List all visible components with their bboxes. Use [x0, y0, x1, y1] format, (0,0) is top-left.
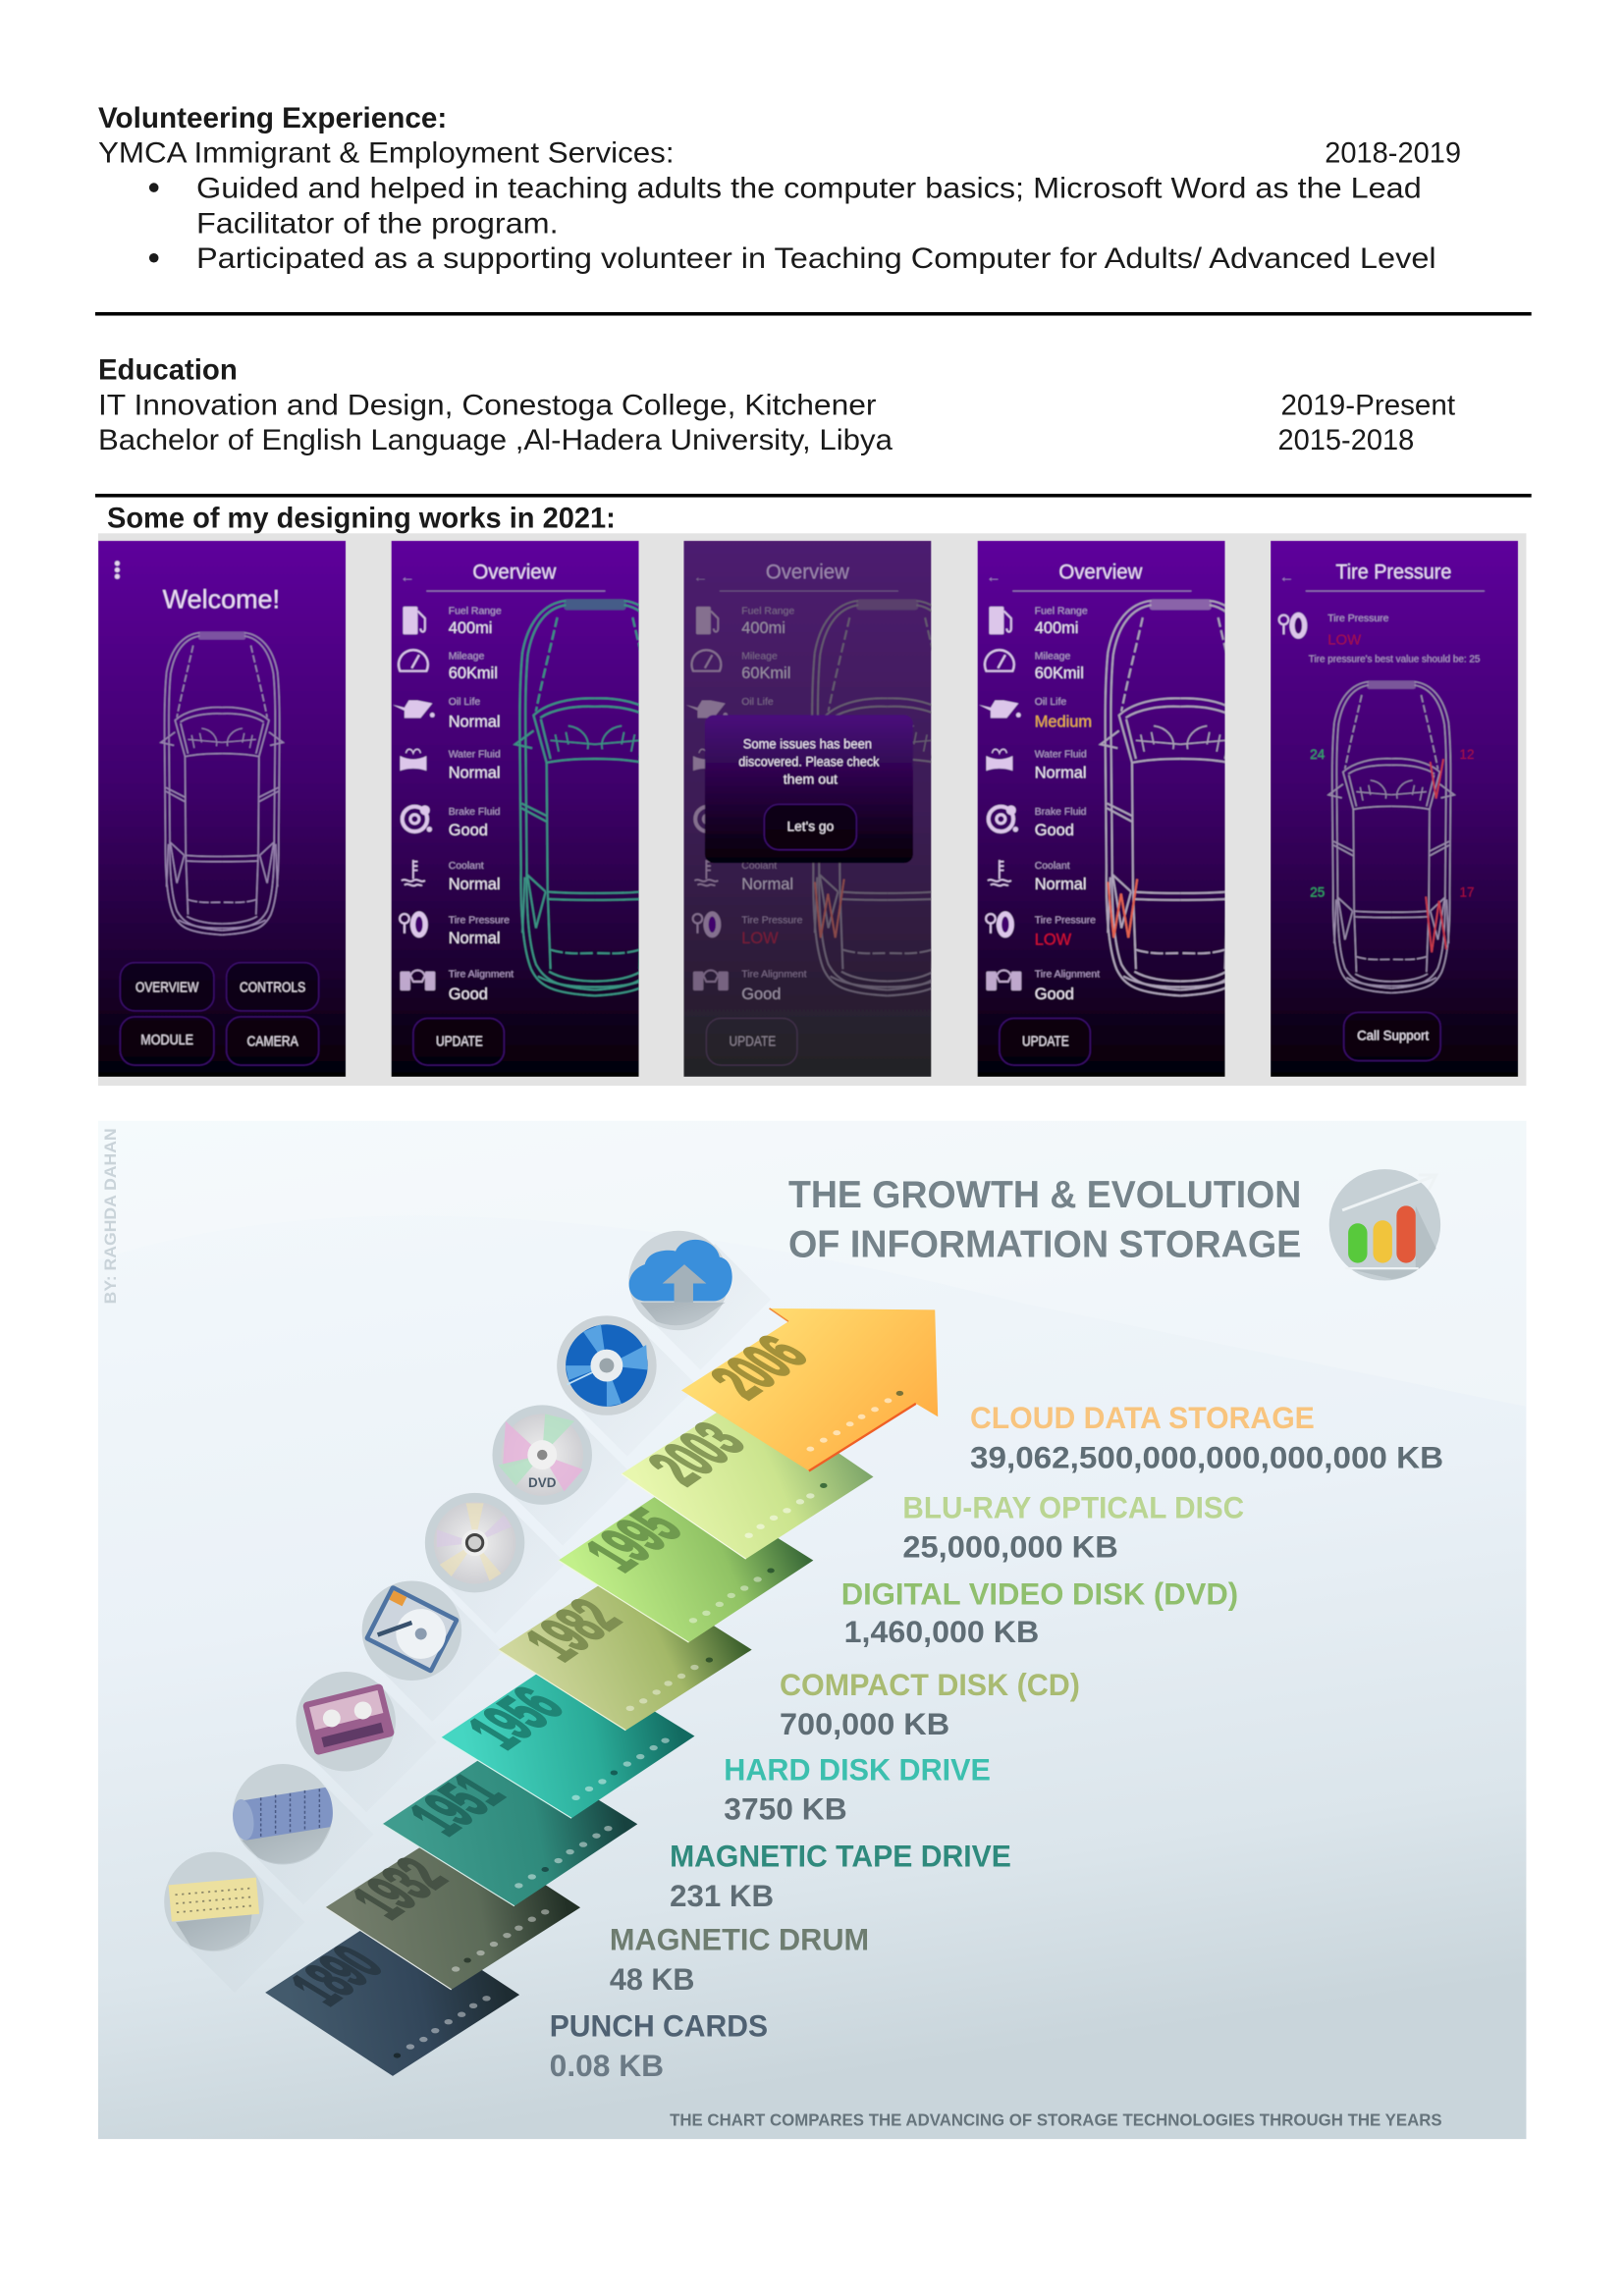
dim status labels: Tire Pressure — [741, 915, 803, 926]
plate: 1982: 1982 — [510, 1589, 635, 1671]
status labels: Fuel Range — [1035, 606, 1088, 616]
status labels: Brake Fluid — [1035, 807, 1087, 818]
car outline — [161, 631, 283, 934]
back arrow: ← — [986, 569, 1001, 586]
title rule — [1012, 591, 1191, 592]
status values: Normal — [449, 876, 501, 893]
status values: Normal — [1035, 765, 1087, 782]
title: Tire Pressure — [1335, 561, 1451, 584]
button labels — [135, 979, 305, 1050]
alert message: discovered. Please check — [738, 755, 880, 770]
icon: compact disc — [425, 1493, 566, 1633]
title rule — [720, 591, 898, 592]
value: blu-ray: 25,000,000 KB — [902, 1530, 1118, 1565]
icon: dvd disc: DVD — [528, 1475, 557, 1490]
back arrow: ← — [1279, 569, 1294, 586]
plate: 1995 — [559, 1478, 813, 1642]
button labels: OVERVIEW — [135, 979, 199, 995]
label: cloud data storage: CLOUD DATA STORAGE — [970, 1401, 1315, 1435]
icon: magnetic drum — [231, 1764, 374, 1904]
status labels: Fuel Range — [449, 606, 502, 616]
plate: 2003 — [622, 1392, 874, 1559]
plate: 1951 — [383, 1742, 637, 1906]
dim red wheel lines — [815, 880, 844, 937]
status labels: Water Fluid — [449, 750, 501, 761]
label: punch cards: PUNCH CARDS — [550, 2009, 768, 2044]
status labels: Brake Fluid — [449, 807, 501, 818]
title: THE GROWTH & EVOLUTION — [788, 1174, 1301, 1216]
label: cd: COMPACT DISK (CD) — [780, 1668, 1080, 1702]
value: cloud: 39,062,500,000,000,000,000 KB — [970, 1441, 1443, 1475]
status values: Good — [1035, 986, 1074, 1003]
update button — [413, 1018, 504, 1065]
update button — [1000, 1018, 1090, 1065]
icon: blu-ray disc — [557, 1315, 697, 1457]
university dates: 2015-2018 — [1277, 424, 1414, 456]
plate: 2003: 2003 — [633, 1413, 760, 1495]
low value: LOW — [1035, 932, 1072, 949]
back arrow: ← — [693, 569, 708, 586]
credit: BY: RAGHDA DAHAN — [102, 1128, 120, 1304]
value: cd: 700,000 KB — [780, 1707, 949, 1741]
storage labels — [550, 1401, 1443, 2083]
value: dvd: 1,460,000 KB — [844, 1615, 1039, 1649]
red wheel lines — [1108, 880, 1137, 937]
heading: designing works: Some of my designing works in 2021: — [107, 502, 616, 534]
status labels: Oil Life — [449, 697, 480, 708]
dim status labels: Tire Alignment — [741, 970, 807, 981]
status values: Normal — [449, 713, 501, 730]
status values: Good — [449, 822, 488, 839]
text block: education — [98, 354, 1456, 456]
status values: 60Kmil — [449, 665, 498, 682]
status labels: Tire Alignment — [1035, 970, 1100, 981]
status labels: Coolant — [1035, 861, 1070, 872]
dim status values — [741, 619, 793, 1003]
title: Overview — [1058, 561, 1143, 584]
status values: Normal — [449, 930, 501, 947]
tire values: 25 — [1310, 884, 1325, 899]
button labels: CAMERA — [246, 1034, 298, 1050]
dim low value: LOW — [741, 930, 779, 947]
status values: 60Kmil — [1035, 665, 1084, 682]
plate: 1956 — [441, 1656, 694, 1818]
tire label: Tire Pressure — [1327, 614, 1389, 624]
status labels — [449, 606, 514, 981]
red rear wheel lines — [1426, 896, 1446, 952]
alert dialog — [705, 715, 913, 863]
status values: Good — [1035, 822, 1074, 839]
buttons — [120, 963, 319, 1065]
dim status values: Good — [741, 986, 781, 1003]
value: hard disk: 3750 KB — [724, 1792, 847, 1827]
plate: 1932: 1932 — [337, 1847, 461, 1929]
icon: cloud upload — [628, 1231, 771, 1370]
welcome title: Welcome! — [163, 584, 280, 614]
value: punch cards: 0.08 KB — [550, 2049, 664, 2083]
university line: Bachelor of English Language ,Al-Hadera University, Libya — [98, 424, 893, 456]
plate: 1995: 1995 — [570, 1499, 697, 1581]
dim status labels: Fuel Range — [741, 606, 794, 616]
status labels: Tire Alignment — [449, 970, 514, 981]
dim car outline — [810, 599, 931, 997]
support button — [1344, 1012, 1440, 1061]
phone screen: overview with issues — [978, 540, 1225, 1077]
status values: 400mi — [449, 619, 492, 637]
status values — [1035, 619, 1087, 1003]
plate: 1951: 1951 — [395, 1764, 518, 1844]
advice line: Tire pressure's best value should be: 25 — [1309, 655, 1481, 666]
tire values: 24 — [1310, 747, 1326, 762]
bullet one text: Guided and helped in teaching adults the computer basics; Microsoft Word as the Lead — [196, 173, 1422, 205]
dim status labels: Coolant — [741, 861, 777, 872]
icon: rising bar chart — [1329, 1169, 1440, 1280]
phone screen: tire pressure — [1271, 541, 1518, 1077]
status labels: Tire Pressure — [449, 915, 510, 926]
phone screen: overview with alert — [683, 540, 931, 1077]
status values: 400mi — [1035, 619, 1078, 637]
car outline teal — [513, 599, 639, 997]
tire icon — [1279, 613, 1307, 639]
title: OF INFORMATION STORAGE — [788, 1224, 1301, 1266]
title: Overview — [766, 561, 850, 584]
tire values: 12 — [1460, 747, 1474, 762]
alert message — [738, 737, 880, 787]
status labels: Oil Life — [1035, 697, 1066, 708]
dim update label: UPDATE — [730, 1034, 776, 1050]
employer line: YMCA Immigrant & Employment Services: — [98, 137, 675, 170]
dim status icons — [685, 607, 729, 990]
status labels: Tire Pressure — [1035, 915, 1096, 926]
status values — [449, 619, 501, 1003]
update label: UPDATE — [436, 1034, 483, 1050]
status values: Normal — [1035, 876, 1087, 893]
phone screen: welcome — [98, 541, 346, 1077]
icon circles with long shadows — [164, 1231, 771, 1993]
college line: IT Innovation and Design, Conestoga College, Kitchener — [98, 389, 877, 421]
text block: volunteering experience — [98, 102, 1461, 275]
bullet one continuation: Facilitator of the program. — [196, 207, 559, 240]
label: blu-ray: BLU-RAY OPTICAL DISC — [902, 1490, 1244, 1524]
bullet two — [149, 253, 158, 263]
status labels: Water Fluid — [1035, 750, 1087, 761]
icon: hard disk — [362, 1580, 503, 1722]
status labels: Mileage — [1035, 652, 1070, 663]
plate: 1890: 1890 — [276, 1936, 398, 2015]
label: magnetic drum: MAGNETIC DRUM — [610, 1923, 869, 1957]
arrow: 2006 — [681, 1308, 938, 1471]
college dates: 2019-Present — [1280, 389, 1456, 421]
footnote: THE CHART COMPARES THE ADVANCING OF STORAGE TECHNOLOGIES THROUGH THE YEARS — [670, 2110, 1442, 2130]
alert message: them out — [784, 773, 838, 787]
icon: punch card — [164, 1852, 304, 1993]
status labels: Mileage — [449, 652, 484, 663]
dim update button — [706, 1018, 797, 1065]
title rule — [426, 591, 605, 592]
dim status labels: Mileage — [741, 652, 778, 663]
phone screen: overview normal — [391, 540, 639, 1077]
menu dots icon — [115, 561, 120, 579]
dim status values: 400mi — [741, 619, 785, 637]
label: dvd: DIGITAL VIDEO DISK (DVD) — [841, 1576, 1238, 1611]
title rule — [1306, 591, 1485, 592]
icon: cassette tape — [296, 1672, 437, 1812]
status labels — [1035, 606, 1100, 981]
low value: LOW — [1327, 632, 1362, 649]
dim status labels — [741, 606, 807, 981]
back arrow: ← — [400, 569, 414, 586]
update label: UPDATE — [1022, 1034, 1069, 1050]
dim status labels: Oil Life — [741, 697, 774, 708]
alert button — [764, 804, 856, 850]
status labels: Coolant — [449, 861, 484, 872]
title — [788, 1174, 1301, 1266]
plate: 1982 — [498, 1570, 752, 1731]
panel: app screens backdrop — [98, 533, 1526, 1086]
value: magnetic drum: 48 KB — [610, 1962, 694, 1997]
label: magnetic tape: MAGNETIC TAPE DRIVE — [670, 1840, 1011, 1874]
dim status values: 60Kmil — [741, 665, 790, 682]
plate: 1890 — [265, 1910, 519, 2076]
employer dates: 2018-2019 — [1325, 137, 1461, 170]
heading: volunteering experience: Volunteering Experience: — [98, 102, 447, 134]
title: Overview — [472, 561, 557, 584]
bullet one — [149, 183, 158, 192]
panel: storage infographic — [98, 1121, 1526, 2139]
label: hard disk: HARD DISK DRIVE — [724, 1752, 991, 1787]
dim status values: Normal — [741, 876, 793, 893]
status values: Normal — [449, 765, 501, 782]
support label: Call Support — [1357, 1029, 1429, 1044]
status icons — [393, 607, 435, 990]
value: magnetic tape: 231 KB — [670, 1879, 774, 1913]
car outline white — [1098, 599, 1225, 997]
medium value: Medium — [1035, 713, 1092, 730]
staircase of storage eras — [265, 1308, 938, 2076]
plate: 1956: 1956 — [453, 1677, 578, 1758]
alert message: Some issues has been — [743, 737, 872, 752]
button labels: CONTROLS — [240, 979, 305, 995]
button labels: MODULE — [140, 1032, 193, 1048]
arrow: 2006: 2006 — [695, 1325, 823, 1409]
car outline — [1328, 680, 1454, 993]
bullet two text: Participated as a supporting volunteer in Teaching Computer for Adults/ Advanced Level — [196, 242, 1436, 275]
status values: Good — [449, 986, 488, 1003]
alert button label: Let's go — [786, 819, 834, 834]
plate: 1932 — [325, 1826, 580, 1990]
tire values — [1310, 747, 1474, 899]
heading: education: Education — [98, 354, 238, 387]
icon: dvd disc — [492, 1405, 633, 1546]
tire values: 17 — [1460, 884, 1474, 899]
red front wheel lines — [1431, 759, 1443, 798]
status icons — [979, 607, 1021, 990]
